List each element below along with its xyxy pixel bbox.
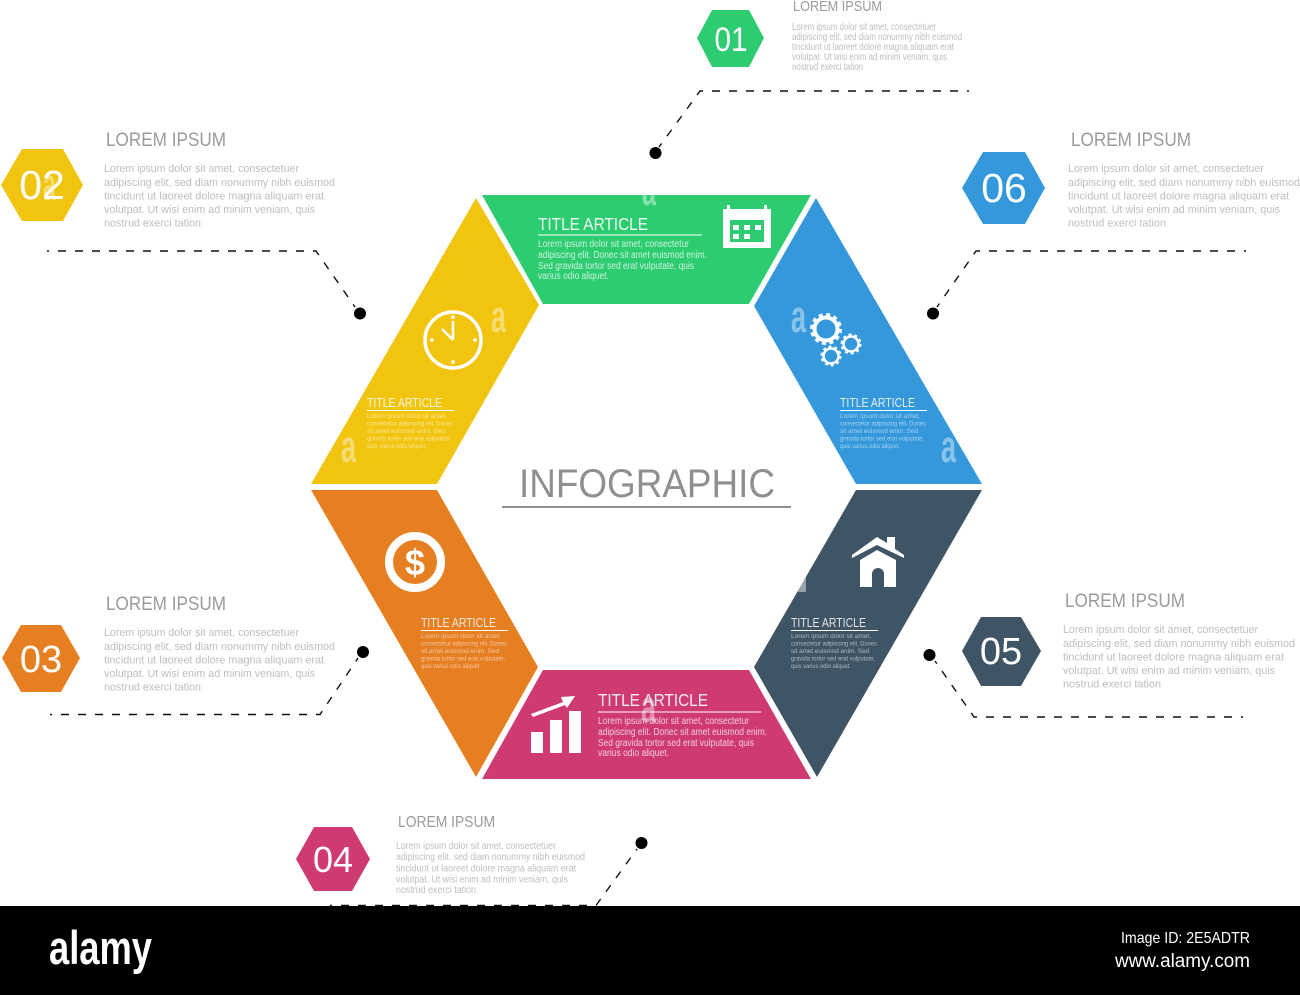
watermark glyphs: a	[341, 421, 357, 472]
footer bar: Image ID: 2E5ADTR	[1121, 930, 1250, 947]
callout 02: tincidunt ut laoreet dolore magna aliquam erat	[104, 190, 324, 202]
callout 05: LOREM IPSUM	[1065, 591, 1185, 612]
callout 01: volutpat. Ut wisi enim ad minim veniam, quis	[792, 52, 947, 63]
callout 05: tincidunt ut laoreet dolore magna aliquam erat	[1063, 652, 1284, 664]
callout 03: 03	[20, 639, 62, 681]
callout 06: LOREM IPSUM	[1071, 130, 1191, 151]
icon: house	[852, 537, 904, 587]
callout 02: adipiscing elit, sed diam nonummy nibh euismod	[104, 177, 335, 189]
callout 03: Lorem ipsum dolor sit amet, consectetuer	[104, 627, 299, 639]
callout 05: 05	[980, 631, 1022, 673]
callout 02: Lorem ipsum dolor sit amet, consectetuer	[104, 163, 299, 175]
panel: pink bottom segment	[482, 670, 811, 779]
panel: orange lower-left segment: quis varius odio aliquet.	[421, 663, 481, 670]
panel: orange lower-left segment: consectetur adipiscing elit. Donec	[421, 640, 507, 648]
panel: pink bottom segment: varius odio aliquet.	[598, 748, 669, 759]
watermark glyphs: a	[642, 164, 657, 215]
watermark glyphs: a	[43, 159, 57, 210]
panel: slate lower-right segment: quis varius odio aliquet.	[791, 663, 851, 670]
panel: slate lower-right segment: Lorem ipsum dolor sit amet,	[791, 633, 871, 640]
panel: blue upper-right segment: gravida tortor sed erat vulputate,	[840, 436, 924, 442]
watermark glyphs: a	[791, 291, 807, 342]
callout 04: adipiscing elit, sed diam nonummy nibh euismod	[396, 852, 585, 863]
footer bar: www.alamy.com	[1114, 951, 1250, 972]
callout 01: nostrud exerci tation	[792, 62, 863, 73]
panel: pink bottom segment: Sed gravida tortor sed erat vulputate, quis	[598, 738, 754, 749]
callout 04	[296, 814, 648, 906]
panel: blue upper-right segment: Lorem ipsum dolor sit amet,	[840, 413, 920, 420]
panel: orange lower-left segment: gravida tortor sed erat vulputate,	[421, 656, 505, 662]
callout 06: tincidunt ut laoreet dolore magna aliquam erat	[1068, 190, 1289, 202]
panel: pink bottom segment: Lorem ipsum dolor sit amet, consectetur	[598, 716, 750, 727]
icon: clock	[425, 312, 481, 368]
callout 04: tincidunt ut laoreet dolore magna aliquam erat	[396, 864, 576, 874]
callout 06: volutpat. Ut wisi enim ad minim veniam, quis	[1068, 204, 1280, 216]
panel: green top segment: Sed gravida tortor sed erat vulputate, quis	[538, 261, 694, 272]
callout 03: LOREM IPSUM	[106, 594, 226, 615]
callout 03: volutpat. Ut wisi enim ad minim veniam, quis	[104, 668, 315, 680]
watermark glyphs: a	[641, 681, 657, 732]
panel: yellow upper-left segment: gravida tortor sed erat vulputate,	[367, 436, 451, 442]
icon: dollar coin: $	[405, 542, 425, 583]
callout 05: volutpat. Ut wisi enim ad minim veniam, quis	[1063, 665, 1275, 677]
callout 03: nostrud exerci tation	[104, 682, 201, 694]
icon: gears	[812, 314, 860, 366]
footer bar: alamy	[49, 921, 152, 974]
panel: pink bottom segment: TITLE ARTICLE	[598, 690, 708, 710]
panel: green top segment: varius odio aliquet.	[538, 271, 609, 282]
panel: blue upper-right segment: sit amet euismod enim. Sed	[840, 428, 918, 435]
callout 02	[1, 130, 366, 320]
panel: yellow upper-left segment	[311, 198, 539, 484]
panel: blue upper-right segment: quis varius odio aliquet.	[840, 443, 900, 450]
callout 02: 02	[19, 162, 65, 208]
panel: slate lower-right segment: gravida tortor sed erat vulputate,	[791, 656, 875, 662]
callout 01: adipiscing elit, sed diam nonummy nibh euismod	[792, 32, 962, 43]
callout 03	[2, 594, 369, 714]
panel: orange lower-left segment: Lorem ipsum dolor sit amet,	[421, 633, 501, 640]
watermark glyphs: a	[941, 421, 957, 472]
panel: orange lower-left segment	[311, 490, 538, 777]
callout 04: nostrud exerci tation	[396, 885, 476, 896]
panel: green top segment: Lorem ipsum dolor sit amet, consectetur	[538, 239, 690, 250]
panel: green top segment: TITLE ARTICLE	[538, 214, 648, 234]
panel: orange lower-left segment: sit amet euismod enim. Sed	[421, 648, 499, 655]
panel: slate lower-right segment	[754, 490, 982, 777]
callout 04: LOREM IPSUM	[398, 814, 495, 831]
watermark glyphs	[43, 159, 957, 732]
callout 06: nostrud exerci tation	[1068, 218, 1166, 230]
panel: blue upper-right segment: TITLE ARTICLE	[840, 396, 915, 410]
icon: dollar coin	[389, 536, 441, 588]
callout 02: LOREM IPSUM	[106, 130, 226, 151]
panel: yellow upper-left segment: sit amet euismod enim. Sed	[367, 428, 445, 435]
callout 06: 06	[981, 165, 1027, 211]
callout 05: Lorem ipsum dolor sit amet, consectetuer	[1063, 624, 1258, 636]
panel: yellow upper-left segment: quis varius odio aliquet.	[367, 443, 427, 450]
center title: INFOGRAPHIC	[519, 462, 775, 506]
callout 01: Lorem ipsum dolor sit amet, consectetuer	[792, 22, 937, 33]
panel: slate lower-right segment: sit amet euismod enim. Sed	[791, 648, 869, 655]
panel: slate lower-right segment: consectetur adipiscing elit. Donec	[791, 640, 877, 648]
callout 02: nostrud exerci tation	[104, 218, 201, 230]
callout 03: tincidunt ut laoreet dolore magna aliquam erat	[104, 654, 324, 666]
watermark glyphs: a	[491, 291, 507, 342]
panel: yellow upper-left segment: consectetur adipiscing elit. Donec	[367, 420, 453, 428]
panel: blue upper-right segment	[754, 198, 982, 484]
callout 05: nostrud exerci tation	[1063, 678, 1161, 690]
icon: calendar	[723, 205, 771, 248]
panel: blue upper-right segment: consectetur adipiscing elit. Donec	[840, 420, 926, 428]
callout 04: Lorem ipsum dolor sit amet, consectetuer	[396, 841, 557, 852]
callout 04: 04	[313, 839, 353, 880]
callout 05: adipiscing elit, sed diam nonummy nibh euismod	[1063, 638, 1295, 650]
callout 06: adipiscing elit, sed diam nonummy nibh euismod	[1068, 177, 1300, 189]
icon: rising bar chart	[531, 696, 581, 753]
panel: slate lower-right segment: TITLE ARTICLE	[791, 616, 866, 630]
callout 02: volutpat. Ut wisi enim ad minim veniam, quis	[104, 204, 315, 216]
callout 06: Lorem ipsum dolor sit amet, consectetuer	[1068, 163, 1264, 175]
panel: yellow upper-left segment: Lorem ipsum dolor sit amet,	[367, 413, 447, 420]
panel: yellow upper-left segment: TITLE ARTICLE	[367, 396, 442, 410]
callout 01: tincidunt ut laoreet dolore magna aliquam erat	[792, 42, 954, 53]
callout 05	[924, 591, 1295, 717]
panel: green top segment	[482, 195, 811, 304]
panel: pink bottom segment: adipiscing elit. Donec sit amet euismod enim.	[598, 727, 767, 738]
footer bar	[0, 906, 1300, 995]
callout 06	[927, 130, 1300, 320]
callout 04: volutpat. Ut wisi enim ad minim veniam, quis	[396, 874, 568, 886]
callout 01	[650, 0, 969, 159]
panel: orange lower-left segment: TITLE ARTICLE	[421, 616, 496, 630]
callout 03: adipiscing elit, sed diam nonummy nibh euismod	[104, 641, 335, 653]
panel: green top segment: adipiscing elit. Donec sit amet euismod enim.	[538, 250, 707, 261]
callout 01: 01	[714, 21, 748, 59]
